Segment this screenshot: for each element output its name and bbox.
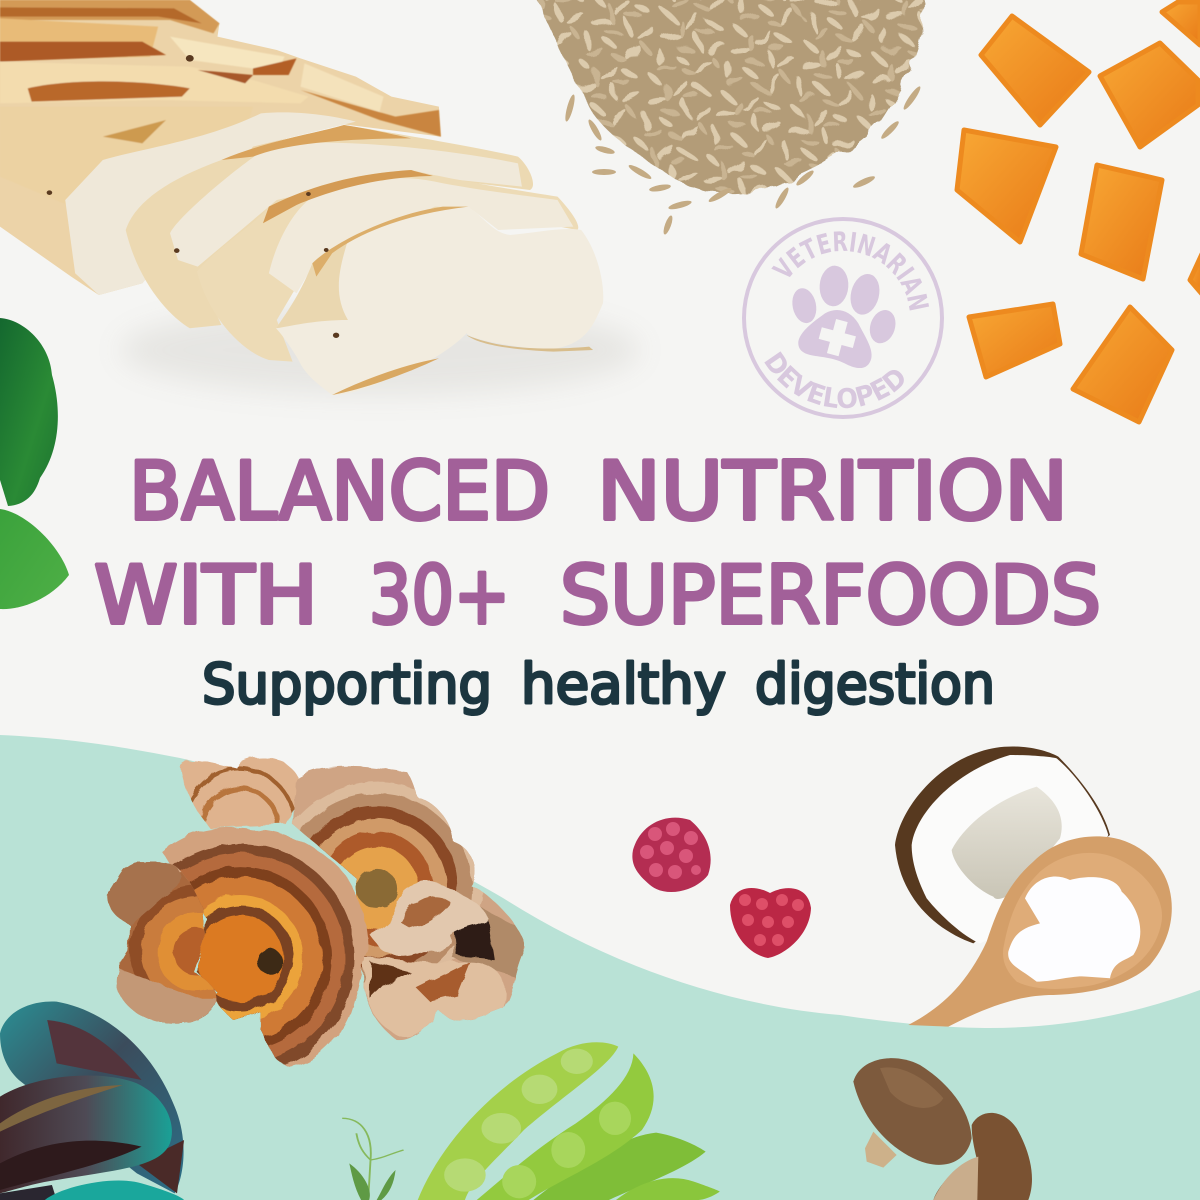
- photo: snow peas and herb: [342, 1042, 720, 1200]
- photo: basil leaves: [0, 318, 69, 609]
- photo: shiitake mushrooms: [853, 1058, 1032, 1200]
- title: with 30+ superfoods: [94, 549, 1101, 642]
- title: balanced nutrition: NUTRITION: [597, 445, 1068, 538]
- photo: raspberries: [632, 818, 811, 958]
- title: with 30+ superfoods: SUPERFOODS: [560, 549, 1101, 642]
- photo: mussels: [0, 1002, 184, 1200]
- subtitle: Supporting: [202, 652, 492, 716]
- photo: brown rice pile: [530, 0, 932, 235]
- photo: turkey tail mushrooms: [103, 752, 530, 1073]
- badge: veterinarian developed: [742, 217, 944, 419]
- title: with 30+ superfoods: WITH: [94, 549, 318, 642]
- subtitle: healthy: [521, 652, 726, 716]
- photo: sliced grilled chicken: [0, 0, 640, 395]
- subtitle: digestion: [755, 652, 995, 716]
- badge text: veterinarian: VETERINARIAN: [772, 231, 929, 310]
- title: balanced nutrition: [129, 445, 1068, 538]
- photo: coconut and wooden spoon: [895, 747, 1172, 1027]
- photo: pumpkin cubes: [957, 2, 1200, 422]
- title: balanced nutrition: BALANCED: [129, 445, 550, 538]
- title: with 30+ superfoods: 30+: [369, 549, 510, 642]
- icon: paw with cross: [789, 265, 900, 368]
- mint wave background: [0, 735, 1200, 1200]
- subtitle: [202, 652, 995, 716]
- badge text: developed: DEVELOPED: [764, 352, 904, 408]
